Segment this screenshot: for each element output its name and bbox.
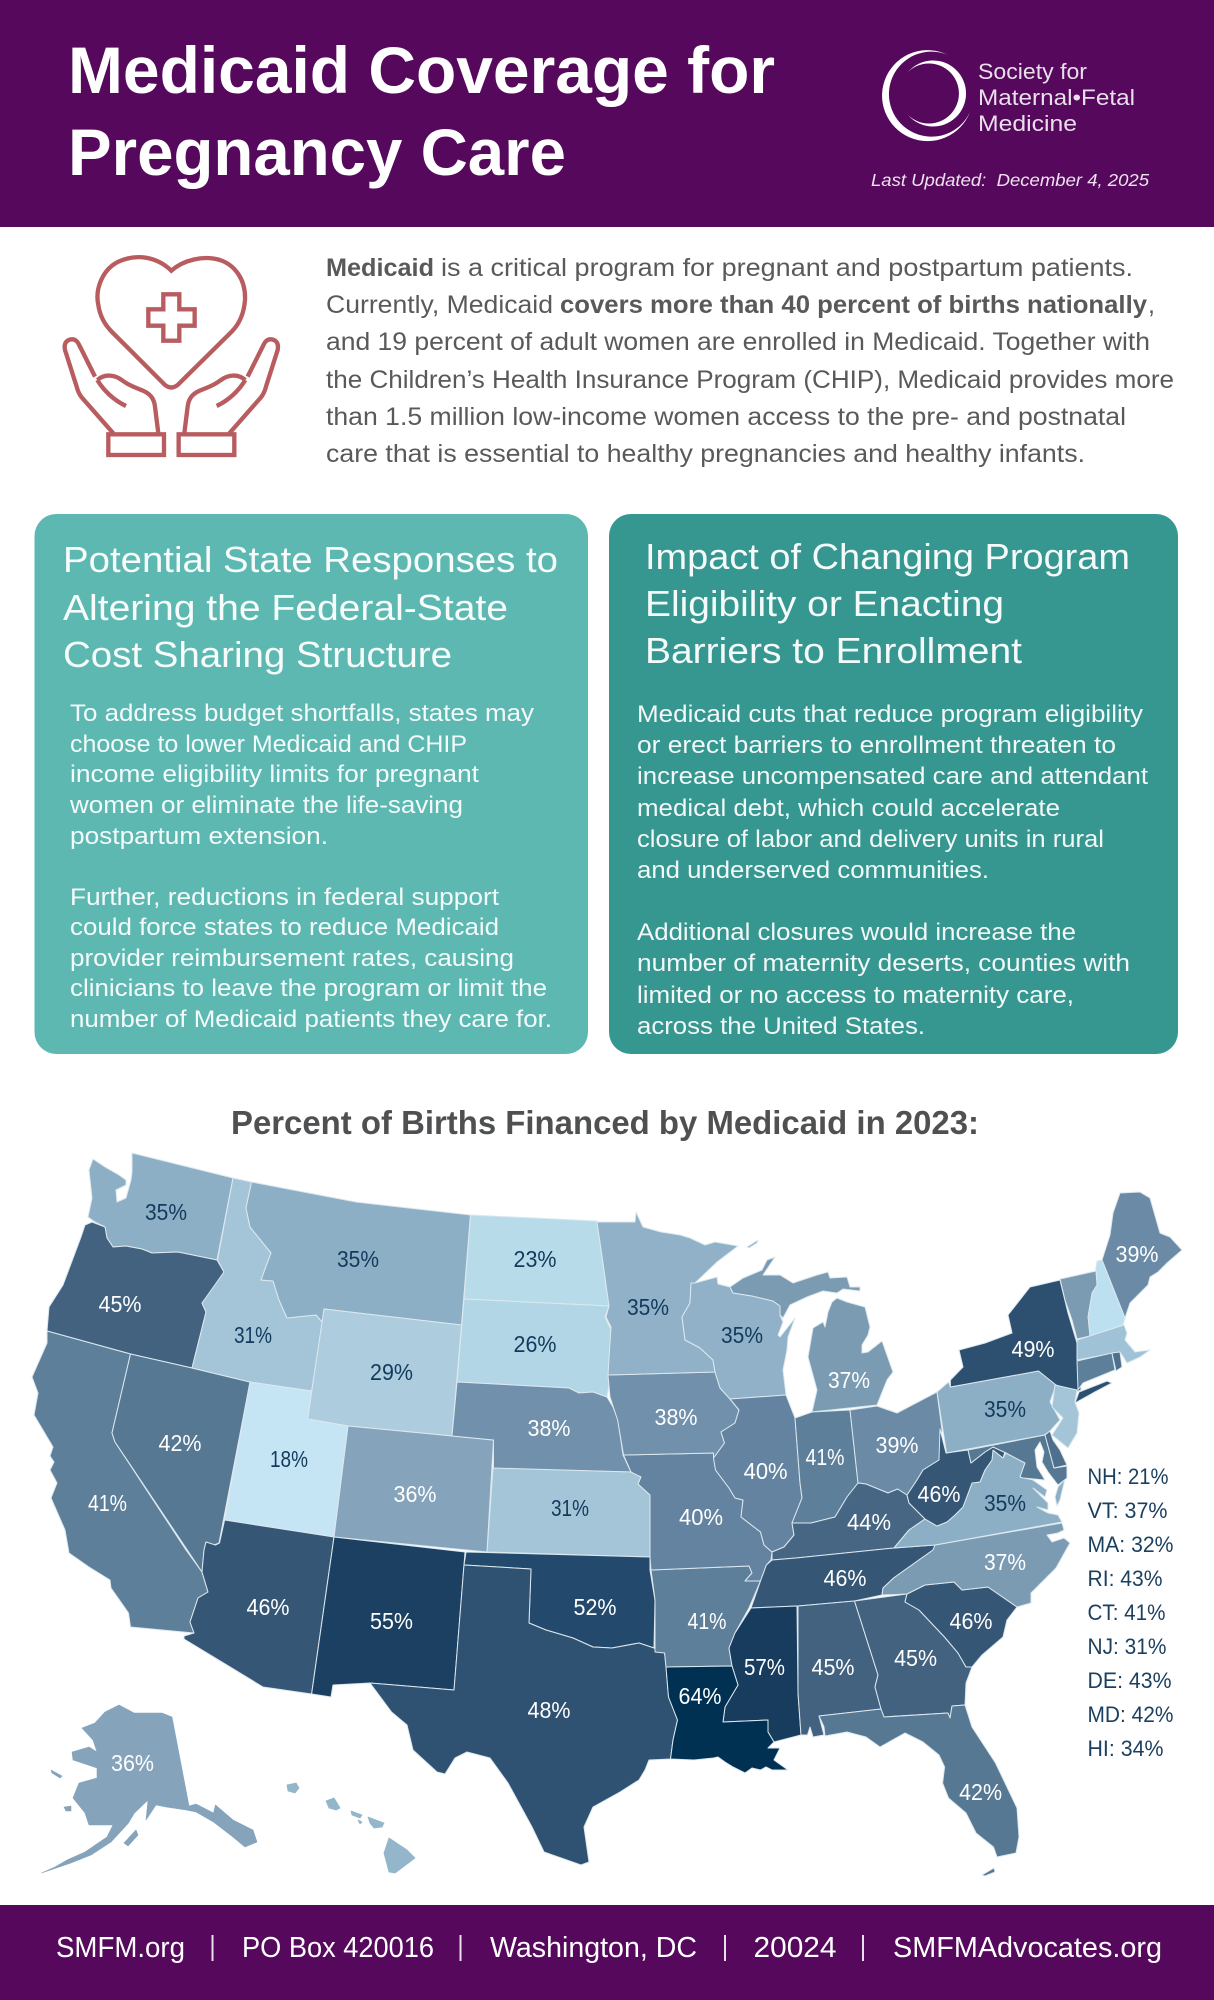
state: SD 26%: 26% [514, 1331, 556, 1357]
state: WA 35%: 35% [145, 1199, 187, 1225]
state: GA 45% [854, 1594, 972, 1718]
intro paragraph [326, 254, 1174, 468]
panel: impact of changing eligibility [609, 514, 1178, 1054]
intro paragraph: is a critical program for pregnant and postpartum patients. [441, 254, 1133, 282]
state: NV 42%: 42% [158, 1430, 202, 1456]
panel body text: increase uncompensated care and attendant [637, 763, 1148, 790]
state: CT [1077, 1353, 1115, 1390]
logo: Society for Maternal-Fetal Medicine: Maternal•Fetal [978, 85, 1135, 110]
panel heading: Impact of Changing Program [645, 536, 1130, 577]
state: CO 36%: 36% [394, 1481, 436, 1507]
state: CA 41% [32, 1331, 208, 1633]
state: MN 35%: 35% [627, 1294, 669, 1320]
state: LA 64% [666, 1666, 788, 1773]
state: MI 37% [730, 1257, 893, 1412]
panel body text [637, 701, 1148, 1040]
intro paragraph: than 1.5 million low-income women access to the pre- and postnatal [326, 403, 1126, 431]
state: NM 55%: 55% [370, 1608, 413, 1634]
state: NV 42% [112, 1354, 250, 1572]
state: SC 46% [905, 1582, 1017, 1667]
logo: Society for Maternal-Fetal Medicine: Medicine [978, 111, 1077, 136]
state: OK 52%: 52% [574, 1594, 616, 1620]
map heading: Percent of Births Financed by Medicaid in 2023: [231, 1104, 979, 1141]
state: AR 41%: 41% [688, 1608, 726, 1634]
state: MT 35%: 35% [337, 1246, 379, 1272]
panel heading: Potential State Responses to [63, 539, 558, 580]
state: IL 40%: 40% [744, 1458, 788, 1484]
state: ND 23%: 23% [514, 1246, 556, 1272]
state: MN 35% [597, 1212, 758, 1375]
footer bar [0, 1905, 1214, 2000]
state: IN 41%: 41% [806, 1444, 844, 1470]
state: CO 36% [334, 1426, 494, 1552]
state: ND 23% [464, 1215, 609, 1306]
panel heading: Eligibility or Enacting [645, 583, 1004, 624]
state: NE 38%: 38% [528, 1415, 570, 1441]
state: AL 45% [798, 1601, 881, 1737]
state: DE [1045, 1431, 1067, 1468]
panel body text: choose to lower Medicaid and CHIP [70, 731, 467, 758]
state: UT 18% [225, 1382, 348, 1537]
panel body text: and underserved communities. [637, 857, 989, 884]
state: ME 39% [1102, 1192, 1182, 1318]
state: NY 49%: 49% [1012, 1336, 1054, 1362]
intro paragraph: care that is essential to healthy pregnancies and healthy infants. [326, 440, 1085, 468]
panel body text: number of Medicaid patients they care for. [70, 1006, 552, 1033]
footer contact text: SMFM.org [56, 1932, 185, 1964]
state: GA 45%: 45% [894, 1645, 937, 1671]
panel body text: limited or no access to maternity care, [637, 982, 1074, 1009]
footer contact text: 20024 [754, 1932, 837, 1964]
state: NC 37%: 37% [984, 1549, 1026, 1575]
state: MO 40% [624, 1453, 772, 1581]
state: RI [1112, 1352, 1122, 1371]
footer contact text: PO Box 420016 [242, 1932, 434, 1964]
panel body text: Additional closures would increase the [637, 919, 1076, 946]
state: IN 41% [792, 1410, 858, 1523]
state: NY 49% [950, 1280, 1112, 1403]
state: OH 39% [850, 1392, 942, 1495]
state: PA 35% [937, 1371, 1060, 1453]
state: OR 45%: 45% [98, 1291, 142, 1317]
logo: Society for Maternal-Fetal Medicine: Society for [978, 59, 1087, 84]
panel body text: income eligibility limits for pregnant [70, 761, 479, 788]
intro paragraph: covers more than 40 percent of births nationally [560, 291, 1147, 319]
panel body text: or erect barriers to enrollment threaten to [637, 732, 1116, 759]
panel body text: Further, reductions in federal support [70, 884, 499, 911]
panel body text: Medicaid cuts that reduce program eligibility [637, 701, 1143, 728]
state: MI 37%: 37% [828, 1367, 870, 1393]
state: TN 46% [751, 1545, 935, 1608]
state: OR 45% [47, 1222, 224, 1368]
icon: hands holding heart with medical cross [65, 257, 278, 455]
state: SD 26% [457, 1299, 611, 1397]
state: TN 46%: 46% [824, 1565, 866, 1591]
state: MO 40%: 40% [679, 1504, 723, 1530]
state: KS 31%: 31% [551, 1495, 589, 1521]
state: CA 41%: 41% [88, 1490, 127, 1516]
state: WY 29% [308, 1309, 462, 1436]
intro paragraph: Medicaid [326, 254, 434, 282]
state: WI 35% [682, 1277, 795, 1399]
state: ID 31%: 31% [234, 1322, 272, 1348]
panel body text: postpartum extension. [70, 823, 328, 850]
panel heading [63, 539, 558, 675]
panel body text: women or eliminate the life-saving [69, 792, 463, 819]
state: MA [1077, 1325, 1150, 1363]
panel body text: closure of labor and delivery units in rural [637, 826, 1104, 853]
state: FL 42% [819, 1705, 1019, 1876]
last updated date: Last Updated: December 4, 2025 [871, 170, 1149, 190]
logo: Society for Maternal-Fetal Medicine [882, 50, 1135, 141]
state: KS 31% [487, 1468, 650, 1557]
panel body text: could force states to reduce Medicaid [70, 914, 499, 941]
small-state value list: NH: 21% [1088, 1464, 1168, 1489]
panel body text: number of maternity deserts, counties with [637, 950, 1130, 977]
state: KY 44%: 44% [847, 1509, 891, 1535]
state: NC 37% [882, 1523, 1070, 1607]
state: MS 57% [723, 1606, 801, 1742]
title: Pregnancy Care [68, 115, 566, 189]
small-state value list: HI: 34% [1088, 1736, 1164, 1761]
state: TX 48%: 48% [528, 1697, 570, 1723]
state: MS 57%: 57% [744, 1654, 785, 1680]
footer contact text: SMFMAdvocates.org [893, 1932, 1162, 1964]
small-state value list: VT: 37% [1088, 1498, 1168, 1523]
state: VA 35% [894, 1450, 1065, 1548]
state: NJ [1052, 1385, 1079, 1448]
panel body text: provider reimbursement rates, causing [70, 945, 514, 972]
panel heading: Barriers to Enrollment [645, 630, 1022, 671]
state: AK 36%: 36% [111, 1750, 154, 1776]
intro paragraph: Currently, Medicaid [326, 291, 553, 319]
state: AR 41% [651, 1566, 760, 1667]
state: WY 29%: 29% [370, 1359, 413, 1385]
small-state value list: MD: 42% [1088, 1702, 1174, 1727]
panel body text: clinicians to leave the program or limit the [70, 975, 547, 1002]
state: MD [968, 1435, 1067, 1485]
title: Medicaid Coverage for [68, 33, 775, 107]
state: FL 42%: 42% [959, 1779, 1002, 1805]
panel heading: Altering the Federal-State [63, 587, 508, 628]
state: MT 35% [246, 1182, 470, 1325]
state: HI [287, 1783, 415, 1873]
state: WI 35%: 35% [721, 1322, 763, 1348]
state: WV 46% [907, 1429, 1005, 1526]
footer contact text [56, 1932, 1162, 1964]
state: OH 39%: 39% [876, 1432, 918, 1458]
header banner [0, 0, 1214, 227]
state: AZ 46%: 46% [246, 1594, 290, 1620]
state: ME 39%: 39% [1116, 1241, 1158, 1267]
small-state value list: RI: 43% [1088, 1566, 1162, 1591]
small-state value list: NJ: 31% [1088, 1634, 1166, 1659]
panel heading [645, 536, 1130, 671]
small-state value list: MA: 32% [1088, 1532, 1174, 1557]
panel heading: Cost Sharing Structure [63, 634, 452, 675]
state: SC 46%: 46% [950, 1608, 992, 1634]
state: ID 31% [192, 1178, 323, 1391]
state: AL 45%: 45% [812, 1654, 854, 1680]
map: percent of births financed by Medicaid [32, 1153, 1182, 1876]
state: WA 35% [88, 1153, 233, 1260]
title [68, 33, 775, 189]
panel: potential state responses [34, 514, 588, 1054]
state: NE 38% [452, 1382, 631, 1472]
small-state value list [1088, 1464, 1174, 1761]
state: LA 64%: 64% [678, 1683, 722, 1709]
footer contact text: Washington, DC [490, 1932, 697, 1964]
state: IL 40% [714, 1395, 802, 1552]
intro paragraph: , [1148, 291, 1155, 319]
state: WV 46%: 46% [918, 1481, 960, 1507]
panel body text: medical debt, which could accelerate [637, 795, 1060, 822]
panel body text: To address budget shortfalls, states may [70, 700, 534, 727]
panel body text [69, 700, 552, 1033]
state: OK 52% [464, 1552, 655, 1648]
small-state value list: CT: 41% [1088, 1600, 1166, 1625]
state: VT [1060, 1271, 1097, 1339]
state: PA 35%: 35% [984, 1396, 1026, 1422]
panel body text: across the United States. [637, 1013, 925, 1040]
small-state value list: DE: 43% [1088, 1668, 1172, 1693]
state: KY 44% [772, 1483, 925, 1560]
state: TX 48% [370, 1565, 678, 1865]
state: NH [1088, 1260, 1125, 1337]
intro paragraph: and 19 percent of adult women are enrolled in Medicaid. Together with [326, 328, 1150, 356]
intro paragraph: the Children’s Health Insurance Program (CHIP), Medicaid provides more [326, 366, 1174, 394]
state: VA 35%: 35% [984, 1490, 1026, 1516]
state: NM 55% [312, 1537, 465, 1697]
state: IA 38%: 38% [654, 1404, 698, 1430]
state: AZ 46% [184, 1520, 334, 1694]
state: IA 38% [608, 1372, 739, 1458]
state: AK 36% [42, 1705, 257, 1873]
state: UT 18%: 18% [270, 1446, 308, 1472]
